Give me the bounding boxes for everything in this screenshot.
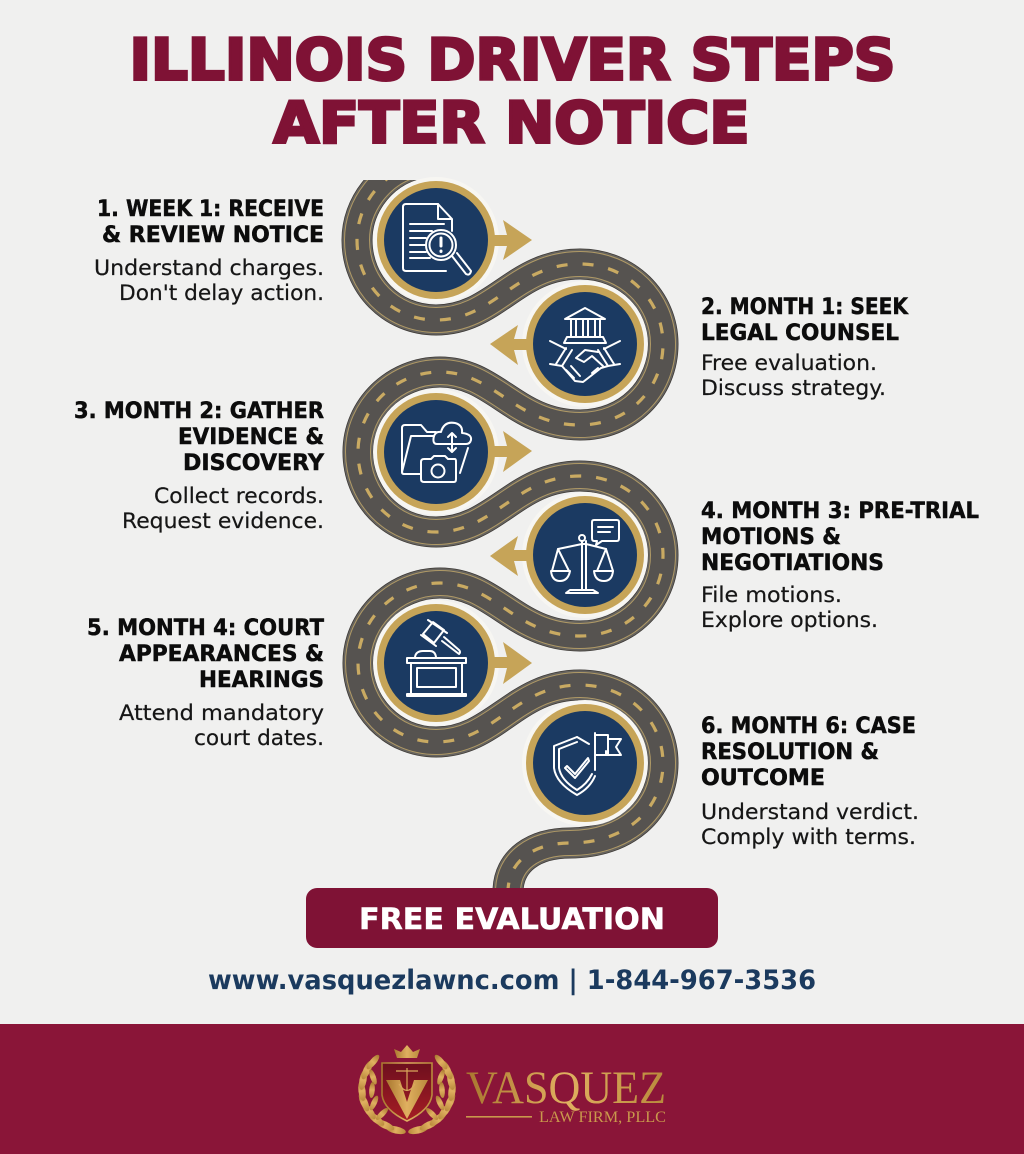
- logo: firm suffix: LAW FIRM, PLLC: [539, 1109, 666, 1126]
- step 2 text: LEGAL COUNSEL: [701, 321, 899, 346]
- step 2 text: Free evaluation.: [701, 351, 877, 375]
- step 6 text: Understand verdict.: [701, 800, 919, 824]
- step 5 marker: [373, 600, 532, 726]
- logo: rule: [466, 1116, 532, 1118]
- icon: shield and flag: [554, 733, 621, 795]
- step 4 text: 4. MONTH 3: PRE-TRIAL: [701, 499, 979, 524]
- step 1 marker: [373, 177, 532, 303]
- step 4 text: NEGOTIATIONS: [701, 551, 884, 576]
- step 5 text: HEARINGS: [199, 668, 324, 693]
- contact line: www.vasquezlawnc.com | 1-844-967-3536: [208, 965, 816, 996]
- arrow: step 1: [485, 220, 532, 260]
- step 6 text: OUTCOME: [701, 766, 825, 791]
- step 5 text: [87, 616, 324, 750]
- step 2 marker: [490, 281, 648, 407]
- logo: shield: [382, 1063, 432, 1121]
- step 6 text: 6. MONTH 6: CASE: [701, 714, 916, 739]
- icon: courthouse and handshake: [550, 308, 620, 382]
- call to action button: [306, 888, 718, 948]
- step 4 text: MOTIONS &: [701, 525, 841, 550]
- footer band: [0, 1024, 1024, 1154]
- step 1 text: & REVIEW NOTICE: [102, 223, 324, 248]
- step 6 text: Comply with terms.: [701, 825, 916, 849]
- winding road: [357, 164, 663, 892]
- step 3 marker: [373, 389, 532, 515]
- step 4 text: [701, 499, 979, 632]
- step 5 text: Attend mandatory: [119, 701, 324, 725]
- title: AFTER NOTICE: [274, 90, 750, 156]
- step 4 text: Explore options.: [701, 608, 878, 632]
- step 1 text: Understand charges.: [94, 256, 324, 280]
- title: ILLINOIS DRIVER STEPS: [130, 28, 895, 94]
- call to action button: FREE EVALUATION: [359, 902, 665, 936]
- step 5 text: court dates.: [194, 726, 324, 750]
- step 1 text: Don't delay action.: [119, 281, 324, 305]
- step 2 text: Discuss strategy.: [701, 376, 886, 400]
- step 3 text: DISCOVERY: [183, 451, 325, 476]
- step 6 text: RESOLUTION &: [701, 740, 879, 765]
- step 4 marker: [490, 492, 648, 618]
- step 6 marker: [522, 700, 648, 826]
- icon: scales and speech bubble: [551, 520, 619, 593]
- icon: document with magnifier: [403, 204, 471, 275]
- step 6 text: [701, 714, 919, 849]
- logo: crown: [394, 1045, 420, 1058]
- arrow: step 3: [485, 431, 532, 472]
- step 3 text: EVIDENCE &: [178, 425, 324, 450]
- arrow: step 4: [490, 536, 535, 576]
- icon: folder, cloud and camera: [402, 423, 471, 482]
- step 2 text: 2. MONTH 1: SEEK: [701, 295, 909, 320]
- step 5 text: 5. MONTH 4: COURT: [87, 616, 324, 641]
- step 3 text: Collect records.: [154, 484, 324, 508]
- arrow: step 2: [490, 325, 535, 365]
- step 3 text: [74, 399, 325, 533]
- step 3 text: 3. MONTH 2: GATHER: [74, 399, 324, 424]
- icon: gavel and bench: [407, 620, 466, 696]
- logo: [357, 1045, 666, 1136]
- step 5 text: APPEARANCES &: [119, 642, 324, 667]
- step 3 text: Request evidence.: [122, 509, 324, 533]
- logo: firm name: VASQUEZ: [466, 1062, 666, 1114]
- arrow: step 5: [485, 642, 532, 684]
- step 2 text: [701, 295, 909, 400]
- step 4 text: File motions.: [701, 583, 842, 607]
- logo: laurel wreath: [357, 1053, 457, 1136]
- step 1 text: 1. WEEK 1: RECEIVE: [97, 197, 324, 222]
- title: [130, 28, 895, 156]
- step 1 text: [94, 197, 324, 305]
